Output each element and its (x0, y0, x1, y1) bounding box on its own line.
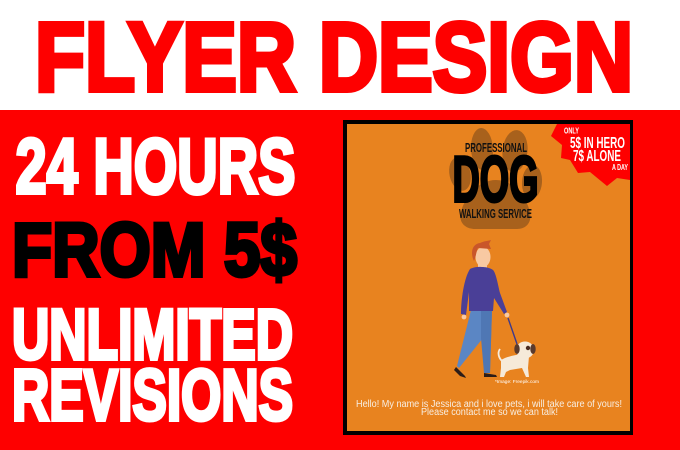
icon: paw print (446, 127, 543, 229)
flyer message: Please contact me so we can talk! (421, 407, 558, 418)
price badge: 7$ ALONE (573, 148, 621, 165)
headline: from 5$: FROM 5$ (12, 208, 297, 293)
neck (478, 260, 487, 270)
hands (462, 315, 466, 319)
flyer heading: walking service: WALKING SERVICE (459, 206, 532, 221)
price badge (551, 124, 630, 186)
illustration: man walking (454, 240, 509, 378)
flyer poster (343, 120, 633, 435)
headline: 24 hours: 24 HOURS (16, 122, 296, 210)
price badge: A DAY (612, 163, 628, 172)
head (476, 247, 490, 267)
leash (508, 318, 517, 344)
image credit: *Image: Freepik.com (495, 379, 539, 384)
poster background (347, 124, 630, 431)
red background panel (0, 110, 680, 450)
torso and arms (461, 267, 507, 315)
hair (472, 240, 491, 261)
flyer heading: dog: DOG (452, 142, 538, 216)
headline: unlimited: UNLIMITED (12, 296, 293, 375)
top white banner (0, 0, 680, 110)
shoes (454, 367, 466, 378)
price badge: ONLY (564, 126, 579, 136)
price badge: 5$ IN HERO (570, 135, 625, 152)
illustration: dog (499, 342, 536, 377)
poster frame (343, 120, 633, 435)
flyer message: Hello! My name is Jessica and i love pets, i will take care of yours! (356, 399, 622, 410)
flyer message (356, 399, 622, 418)
headline: revisions: REVISIONS (12, 356, 293, 436)
flyer heading: professional: PROFESSIONAL (465, 140, 527, 155)
legs (457, 310, 492, 373)
